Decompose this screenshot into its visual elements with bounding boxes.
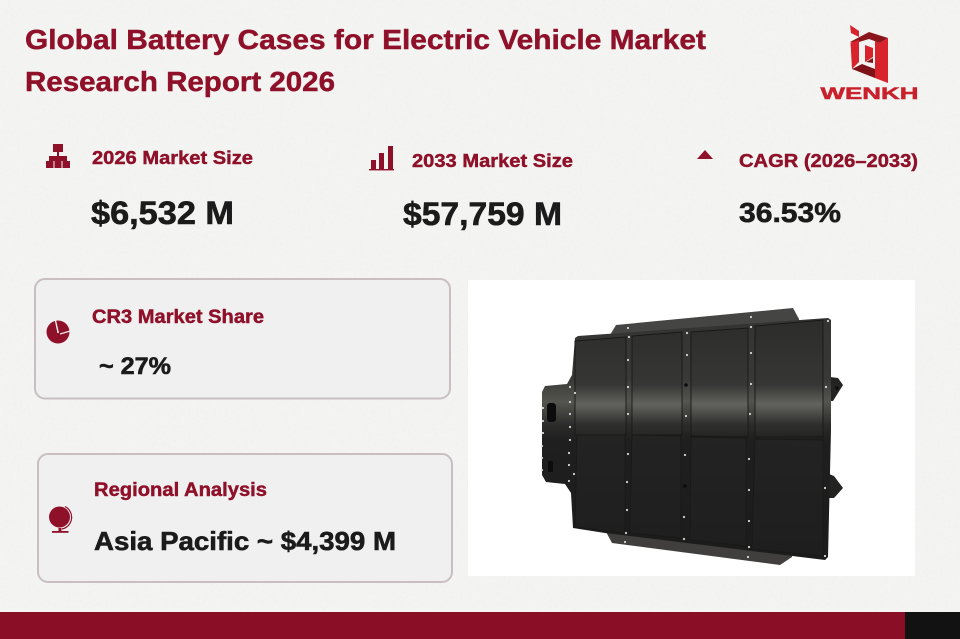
value: 36.53% xyxy=(739,197,841,228)
title: Global Battery Cases for Electric Vehicle Market xyxy=(25,24,706,55)
icon: globe xyxy=(49,506,72,533)
stat: 2026 market size xyxy=(46,144,253,231)
title: Research Report 2026 xyxy=(25,66,335,97)
value: $57,759 M xyxy=(403,196,562,232)
icon: bar chart xyxy=(369,146,394,170)
rivets xyxy=(541,316,829,558)
bottom flange xyxy=(605,530,792,565)
icon: up triangle xyxy=(697,150,713,159)
panel: CR3 market share xyxy=(35,279,450,398)
icon: hierarchy xyxy=(46,144,70,168)
logo: WENKH: WENKH xyxy=(820,85,918,103)
title xyxy=(25,24,706,97)
label: Regional Analysis xyxy=(94,480,267,501)
value: Asia Pacific ~ $4,399 M xyxy=(94,526,396,556)
stat: CAGR xyxy=(697,150,918,228)
panel: regional analysis xyxy=(38,454,452,582)
product photo: battery case xyxy=(468,280,915,576)
top flange xyxy=(610,308,799,340)
slots and holes xyxy=(547,383,839,488)
label: CAGR (2026–2033) xyxy=(739,150,918,171)
label: 2033 Market Size xyxy=(412,150,573,171)
value: $6,532 M xyxy=(91,195,234,231)
right brackets xyxy=(830,377,843,401)
label: 2026 Market Size xyxy=(92,147,253,168)
stat: 2033 market size xyxy=(369,146,573,232)
footer bar xyxy=(0,612,960,639)
logo: WENKH xyxy=(820,25,918,103)
panel grid xyxy=(575,320,823,556)
icon: pie chart xyxy=(46,320,70,344)
label: CR3 Market Share xyxy=(92,307,264,328)
case body xyxy=(542,318,831,560)
value: ~ 27% xyxy=(99,353,171,380)
